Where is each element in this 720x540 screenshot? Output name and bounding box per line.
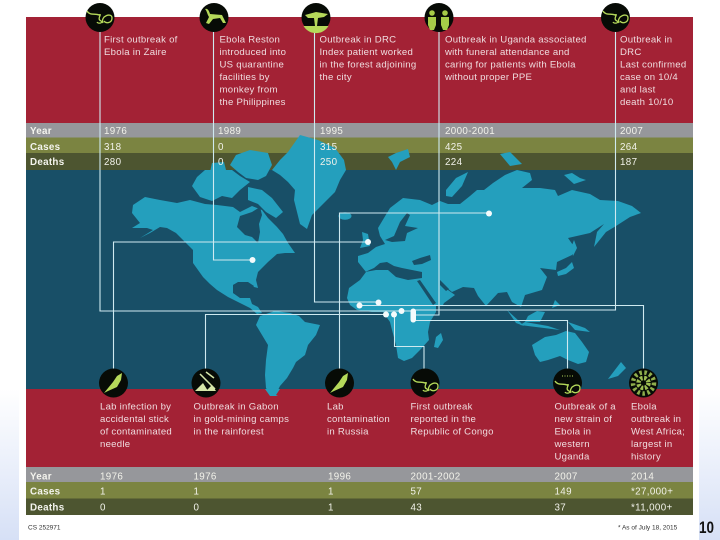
persian gulf [440,280,449,291]
panel: top outbreaks background [26,17,693,124]
south america [256,311,320,396]
top table values: Deaths [30,157,65,168]
bottom event descriptions: new strain of [554,414,612,425]
bottom table values: Deaths [30,502,65,514]
bottom table values: 1 [100,486,106,498]
southeast asia islands [507,310,524,326]
bottom event descriptions: Uganda [554,452,590,462]
top event descriptions: in the forest adjoining [320,60,416,70]
bottom event descriptions: contamination [327,414,390,425]
top event descriptions: facilities by [220,72,270,83]
bottom table values: 1976 [194,472,217,482]
bottom event descriptions [100,402,685,462]
top event descriptions: Ebola Reston [220,34,280,46]
source code note: CS 252971 [28,524,61,532]
top table values: 425 [445,142,463,153]
panel: bottom data table [26,467,693,515]
bottom table values: 2001-2002 [410,472,461,482]
top event descriptions: First outbreak of [104,34,178,46]
bottom event descriptions: Outbreak of a [554,402,616,412]
bottom table values [30,472,673,514]
bottom event descriptions: West Africa; [631,426,685,438]
footnote: * As of July 18, 2015 [618,524,678,532]
eurasia and africa [347,170,641,361]
top table values: 2007 [620,126,643,137]
madagascar [434,333,443,348]
top event descriptions: and last [620,84,656,96]
bottom event descriptions: western [554,439,590,450]
canadian arctic islands [192,170,250,201]
top event descriptions: the Philippines [220,97,286,108]
bottom table values: 1976 [100,472,123,482]
icon: west africa virus cluster [629,368,658,398]
top event descriptions: monkey from [220,84,278,96]
icon: ebola virus 1 [86,3,114,32]
icon: syringe needle 1 [99,368,128,398]
top event descriptions: Outbreak in [620,34,672,46]
top event descriptions: DRC [620,47,642,58]
top event descriptions: Outbreak in Uganda associated [445,34,587,46]
bottom event descriptions: Ebola [631,402,657,412]
top table values [30,126,643,168]
top event descriptions: US quarantine [220,60,284,70]
bottom event descriptions: history [631,452,661,462]
top table values: 1989 [218,126,241,137]
icon: new strain virus [553,368,582,398]
new siberian islands [564,173,586,184]
top event descriptions: Ebola in Zaire [104,47,167,58]
top event descriptions: case on 10/4 [620,72,678,83]
bottom table values: 0 [194,502,200,514]
bottom table values: 2014 [631,472,654,482]
bottom table values: *11,000+ [631,502,673,514]
bottom table values: Year [30,472,52,482]
top event descriptions: Outbreak in DRC [320,34,396,46]
bottom table values: 37 [554,502,566,514]
novaya zemlya [446,172,468,197]
red sea [417,280,436,305]
gulf of mexico [233,282,254,296]
bottom table values: 2007 [554,472,578,482]
top table values: 2000-2001 [445,126,495,137]
top event descriptions: the city [320,72,352,83]
icon: syringe needle 2 [325,368,354,398]
south america tip over red band [265,389,280,396]
svalbard [388,149,410,170]
top event descriptions: Last confirmed [620,60,686,70]
bottom table values: 1 [328,502,334,514]
connector lines and location markers [100,30,644,390]
severnaya zemlya [500,152,522,166]
top table values: Cases [30,142,61,153]
top table values: 187 [620,157,637,168]
top table values: 1976 [104,126,127,137]
icon: funeral figures [424,3,454,32]
bottom table values: *27,000+ [631,486,673,498]
bottom event descriptions: needle [100,439,130,450]
top event descriptions: caring for patients with Ebola [445,60,576,70]
bottom event descriptions: largest in [631,439,672,450]
iceland [338,212,352,220]
bottom table values: 43 [410,502,422,514]
top table values: 224 [445,157,463,168]
bottom table values: 149 [554,486,572,498]
bottom event descriptions: in the rainforest [194,426,264,438]
bottom event descriptions: in Russia [327,426,369,438]
top table values: 280 [104,157,122,168]
new zealand [608,362,626,379]
bottom event descriptions: Republic of Congo [410,426,494,438]
bottom event descriptions: reported in the [410,414,476,425]
panel: bottom outbreaks background [26,389,693,467]
top table values: 0 [218,142,224,153]
top table values: 315 [320,142,338,153]
hudson bay [237,207,262,243]
bottom event descriptions: accidental stick [100,414,169,425]
bottom event descriptions: Outbreak in Gabon [194,402,279,412]
bottom event descriptions: of contaminated [100,426,172,438]
sakhalin [571,240,577,256]
bottom event descriptions: in gold-mining camps [194,414,289,425]
japan [557,262,574,276]
black sea [412,255,431,265]
world map [26,135,693,396]
bottom event descriptions: Lab infection by [100,402,171,412]
bottom table values: Cases [30,486,61,498]
bottom event descriptions: outbreak in [631,414,681,425]
top event descriptions: with funeral attendance and [444,47,570,58]
bottom event descriptions: Ebola in [554,426,591,438]
north america [132,197,295,314]
top table values: Year [30,126,52,137]
bottom table values: 0 [100,502,106,514]
slide number: 10 [699,518,714,537]
top event descriptions: without proper PPE [444,72,532,83]
bottom table values: 1 [194,486,199,498]
top table values: 264 [620,142,638,153]
top table values: 0 [218,157,224,168]
icon: mining pick [192,368,220,398]
british isles [360,232,370,248]
bottom table values: 1 [328,486,334,498]
panel: top data table [26,123,693,170]
top event descriptions: introduced into [220,47,286,58]
top table values: 318 [104,142,122,153]
icon: monkey [200,3,228,32]
top event descriptions [104,34,686,108]
top table values: 1995 [320,126,343,137]
top event descriptions: Index patient worked [320,47,413,58]
bottom event descriptions: First outbreak [410,402,473,412]
top event descriptions: death 10/10 [620,97,673,108]
icon: ebola virus 3 [410,368,440,398]
bottom table values: 1996 [328,472,351,482]
australia [532,331,589,364]
bottom event descriptions: Lab [327,402,344,412]
greenland [272,135,346,229]
icon: forest tree [302,3,330,33]
bottom table values: 57 [410,486,422,498]
icon: ebola virus 2 [601,3,630,32]
mediterranean [365,262,422,280]
baltic sea [385,213,418,242]
top table values: 250 [320,157,338,168]
